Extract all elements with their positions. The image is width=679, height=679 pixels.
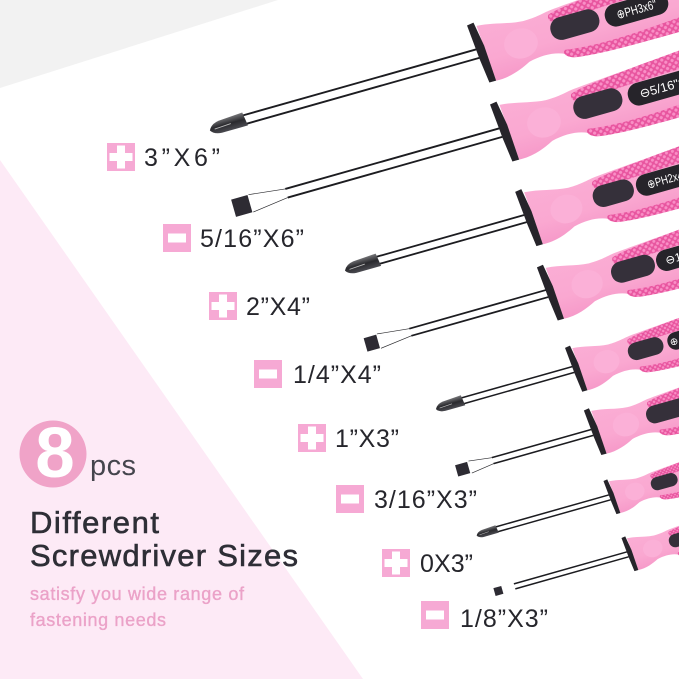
size label: 3/16x3 minus: 3/16”X3” (374, 486, 477, 514)
subtitle: fastening needs (30, 610, 166, 630)
size label: 3x6 plus (107, 143, 220, 172)
badge: 8 pcs (20, 414, 136, 493)
screwdriver 2: 5/16x6 flat (224, 21, 679, 245)
size label: 5/16x6 minus: 5/16”X6” (200, 225, 304, 253)
screwdriver 4: 1/4x4 flat (356, 190, 679, 379)
badge: 8 pcs: pcs (90, 450, 136, 482)
heading: Different (30, 505, 159, 540)
size label: 1/4x4 minus (254, 360, 381, 389)
heading (30, 505, 298, 573)
background: pink panel (0, 160, 363, 679)
subtitle (30, 584, 245, 630)
screwdriver 1: PH3x6 (200, 0, 679, 166)
screwdriver 3: PH2x4 (335, 113, 679, 304)
screwdriver 5: PH1x3 (428, 284, 679, 437)
screwdriver 8: 1/8x3 flat (489, 490, 679, 613)
size label: 0x3 plus (382, 549, 473, 578)
size label: 1/4x4 minus: 1/4”X4” (293, 361, 381, 389)
screwdriver 7: 0x3 (471, 433, 679, 556)
size label: 2x4 plus: 2”X4” (246, 293, 310, 321)
heading: Screwdriver Sizes (30, 538, 298, 573)
screwdriver 6: 3/16x3 flat (449, 346, 679, 499)
size label: 1x3 plus (298, 424, 399, 453)
background: light gray corner (0, 0, 278, 88)
size label: 0x3 plus: 0X3” (420, 550, 473, 578)
size label: 1x3 plus: 1”X3” (335, 425, 399, 453)
size label: 3x6 plus: 3”X6” (144, 144, 220, 172)
badge: 8 pcs: 8 (35, 414, 75, 493)
size label: 1/8x3 minus: 1/8”X3” (460, 605, 548, 633)
size label: 1/8x3 minus (421, 601, 548, 633)
size label: 2x4 plus (209, 292, 310, 321)
subtitle: satisfy you wide range of (30, 584, 245, 604)
